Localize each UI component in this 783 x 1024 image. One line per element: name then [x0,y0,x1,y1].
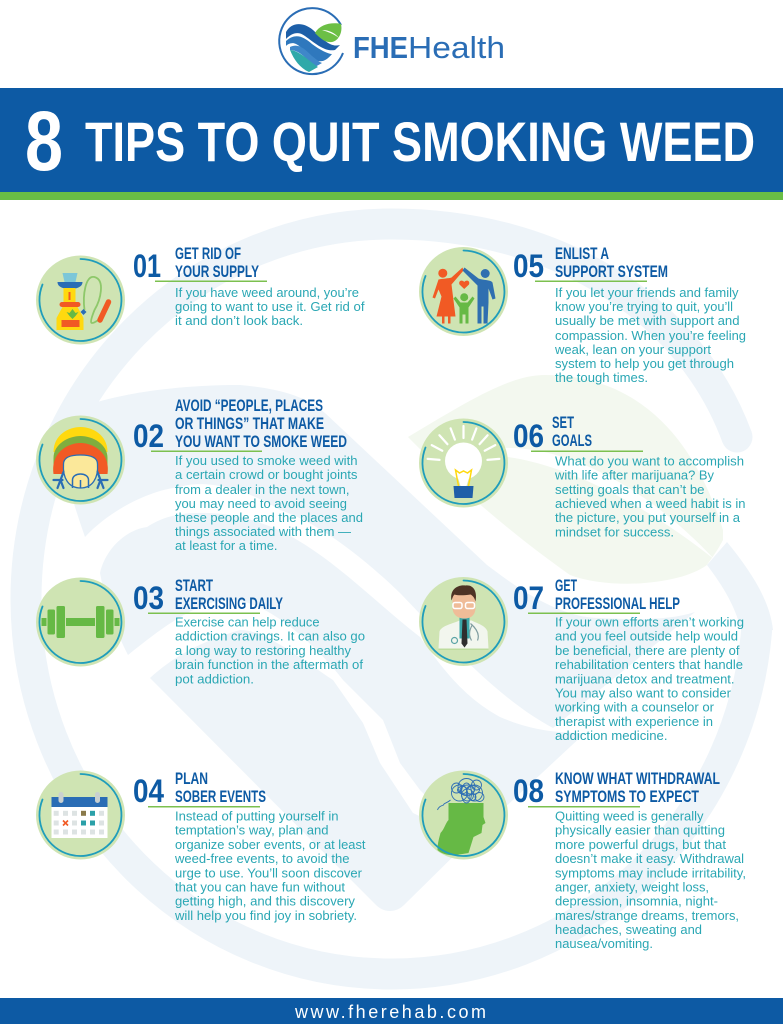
background watermark logo [26,224,773,974]
body text: a long way to restoring healthy [175,644,352,658]
body text: organize sober events, or at least [175,838,366,852]
body text: addiction medicine. [555,729,668,743]
panel: tip 01 [36,244,365,344]
body text: Instead of putting yourself in [175,810,338,824]
heading [175,396,347,451]
body text: the picture, you put yourself in a [555,511,741,525]
body text: going to want to use it. Get rid of [175,300,365,314]
body text: If your own efforts aren’t working [555,616,744,630]
body text: temptation’s way, plan and [175,824,328,838]
heading: EXERCISING DAILY [175,594,283,613]
heading: KNOW WHAT WITHDRAWAL [555,769,720,788]
body text: will help you find joy in sobriety. [174,909,357,923]
heading [555,244,668,281]
body text: weed-free events, to avoid the [174,852,350,866]
heading: ENLIST A [555,244,609,263]
body text: know you’re trying to quit, you’ll [555,300,733,314]
heading [552,413,592,450]
tip number: 02 [133,418,164,454]
body text: setting goals that can’t be [555,483,704,497]
body text: addiction cravings. It can also go [175,630,365,644]
body text: mindset for success. [555,526,674,540]
body text: and you feel outside help would [555,630,738,644]
body text: You may also want to consider [555,686,732,700]
heading: YOUR SUPPLY [175,262,259,281]
heading [175,576,283,613]
tip number: 08 [513,773,544,809]
icon: calendar [36,770,125,860]
body text: urge to use. You’ll soon discover [175,866,363,880]
heading: GET RID OF [175,244,241,263]
body text [175,616,365,686]
heading: PROFESSIONAL HELP [555,594,680,613]
heading: PLAN [175,769,208,788]
body text: marijuana detox and treatment. [555,672,734,686]
heading [555,769,720,806]
body text: doesn’t make it easy. Withdrawal [555,852,744,866]
panel: tip 03 [36,576,365,686]
body text [554,454,746,540]
icon: hookah [36,256,125,344]
panel: tip 08 [419,769,746,951]
body text: a certain crowd or bought joints [175,468,358,482]
heading [175,769,266,806]
icon: light bulb [419,418,508,508]
body text: anger, anxiety, weight loss, [555,880,709,894]
body text [174,810,366,923]
body text: getting high, and this discovery [175,895,356,909]
icon: rasta head [36,416,125,504]
body text: depression, insomnia, night- [555,895,718,909]
panel: tip 07 [419,576,744,743]
logo wordmark: FHE [353,30,408,65]
body text: brain function in the aftermath of [175,658,363,672]
tip number: 06 [513,418,544,454]
heading: OR THINGS” THAT MAKE [175,414,324,433]
heading: GOALS [552,431,592,450]
heading: AVOID “PEOPLE, PLACES [175,396,323,415]
body text: usually be met with support and [555,314,740,328]
body text: from a dealer in the next town, [175,483,350,497]
body text: physically easier than quitting [555,824,725,838]
body text: If you let your friends and family [555,286,739,300]
heading [555,576,680,613]
footer url: www.fherehab.com [294,1002,486,1022]
body text [175,286,365,328]
panel: tip 02 [36,396,363,553]
icon: dumbbell [36,578,125,666]
body text: be beneficial, there are plenty of [555,644,740,658]
body text: it and don’t look back. [175,314,303,328]
heading: SYMPTOMS TO EXPECT [555,787,699,806]
logo wordmark: Health [408,30,505,65]
body text: with life after marijuana? By [554,469,715,483]
body text: the tough times. [555,371,648,385]
body text [555,810,746,951]
icon: head with tangled thoughts [419,770,508,860]
heading: SET [552,413,574,432]
heading [175,244,259,281]
body text: weak, lean on your support [554,343,711,357]
title number: 8 [25,94,63,188]
heading: YOU WANT TO SMOKE WEED [175,432,347,451]
body text: Quitting weed is generally [555,810,704,824]
body text: achieved when a weed habit is in [555,497,746,511]
body text: pot addiction. [175,672,254,686]
heading: SUPPORT SYSTEM [555,262,668,281]
body text: working with a counselor or [554,701,715,715]
body text: mares/strange dreams, tremors, [555,909,739,923]
tip number: 01 [133,248,161,284]
body text: headaches, sweating and [555,923,702,937]
icon: family [419,247,508,336]
heading: GET [555,576,577,595]
footer [0,998,783,1024]
body text: Exercise can help reduce [175,616,320,630]
body text [554,286,746,385]
title banner [0,88,783,200]
icon: doctor [419,577,508,666]
panel: tip 04 [36,769,366,923]
body text: rehabilitation centers that handle [555,658,743,672]
body text: these people and the places and [175,511,363,525]
body text [175,454,363,553]
tip number: 05 [513,248,544,284]
panel: tip 06 [419,413,746,540]
body text: that you can have fun without [175,880,345,894]
logo wordmark [353,30,505,65]
body text: symptoms may include irritability, [555,866,746,880]
body text: things associated with them — [175,525,351,539]
tip number: 04 [133,773,164,809]
body text: therapist with experience in [555,715,713,729]
body text: you may need to avoid seeing [175,497,347,511]
logo mark [279,8,343,74]
body text: compassion. When you’re feeling [555,329,746,343]
body text: nausea/vomiting. [555,937,653,951]
body text: at least for a time. [175,539,278,553]
heading: START [175,576,213,595]
panel: tip 05 [419,244,746,385]
heading: SOBER EVENTS [175,787,266,806]
body text: more powerful drugs, but that [555,838,726,852]
tip number: 03 [133,580,164,616]
body text: If you used to smoke weed with [175,454,358,468]
tip number: 07 [513,580,544,616]
body text [554,616,744,743]
body text: What do you want to accomplish [555,454,744,468]
body text: If you have weed around, you’re [175,286,359,300]
logo [279,8,505,74]
body text: system to help you get through [555,357,734,371]
